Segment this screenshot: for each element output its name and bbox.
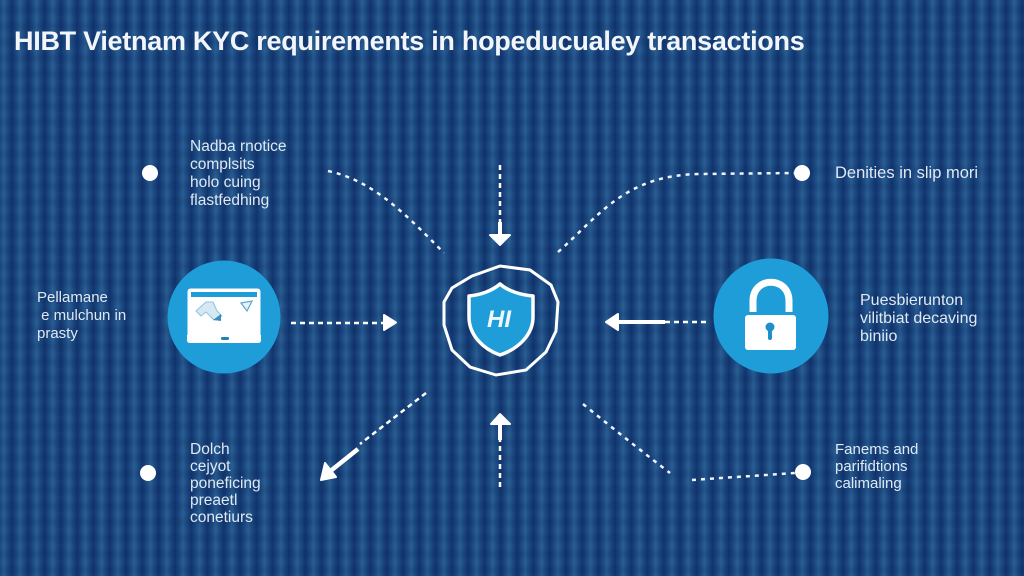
screen sketch (196, 302, 222, 320)
connector: top left dashed (328, 171, 444, 253)
text: bottom left: poneficing (190, 475, 261, 492)
text: bottom right (835, 441, 918, 492)
bullet: top right (794, 165, 810, 181)
shield letters: HI (487, 306, 512, 333)
arrow: right, pointing left to shield (606, 314, 706, 330)
text: bottom right: Fanems and (835, 441, 918, 458)
central shield emblem (444, 266, 558, 375)
lock body (745, 315, 796, 350)
text: middle left: e mulchun in (41, 307, 126, 324)
outer ring (444, 266, 558, 375)
arrow: bottom, pointing up (491, 414, 510, 487)
bullet: top left (142, 165, 158, 181)
text: middle right: Puesbierunton (860, 292, 963, 309)
text: top right: Denities in slip mori (835, 164, 978, 182)
text: top left: Nadba rnotice (190, 138, 287, 155)
text: top left (190, 138, 287, 209)
connector: bottom right dashed (583, 404, 795, 480)
text: bottom left (190, 441, 261, 526)
laptop icon (168, 260, 280, 374)
text: middle right (860, 292, 977, 345)
bullet: bottom left (140, 465, 156, 481)
laptop screen (189, 290, 259, 336)
bullet: bottom right (795, 464, 811, 480)
shield (469, 284, 533, 355)
text: top left: complsits (190, 156, 255, 173)
laptop base (187, 335, 261, 343)
text: middle left: prasty (37, 325, 78, 342)
text: bottom right: calimaling (835, 475, 902, 492)
text: bottom left: Dolch (190, 441, 230, 458)
title: HIBT Vietnam KYC requirements in hopeducualey transactions (14, 26, 804, 56)
text: bottom left: preaetl (190, 492, 237, 509)
keyhole (766, 322, 774, 332)
text: middle left: Pellamane (37, 289, 108, 306)
shackle (753, 282, 789, 312)
text: top left: holo cuing (190, 174, 261, 191)
connector: top right dashed (558, 173, 795, 252)
text: middle right: vilitbiat decaving (860, 310, 977, 327)
lock icon (714, 258, 828, 374)
text: bottom left: cejyot (190, 458, 230, 475)
text: top left: flastfedhing (190, 192, 269, 209)
text: middle right: biniio (860, 328, 897, 345)
text: bottom left: conetiurs (190, 509, 253, 526)
text: bottom right: parifidtions (835, 458, 908, 475)
arrow: top, pointing down (490, 165, 510, 245)
arrow: left, pointing right to shield (291, 315, 396, 330)
text: middle left (37, 289, 126, 342)
arrow: bottom left, pointing down-left (321, 393, 426, 480)
